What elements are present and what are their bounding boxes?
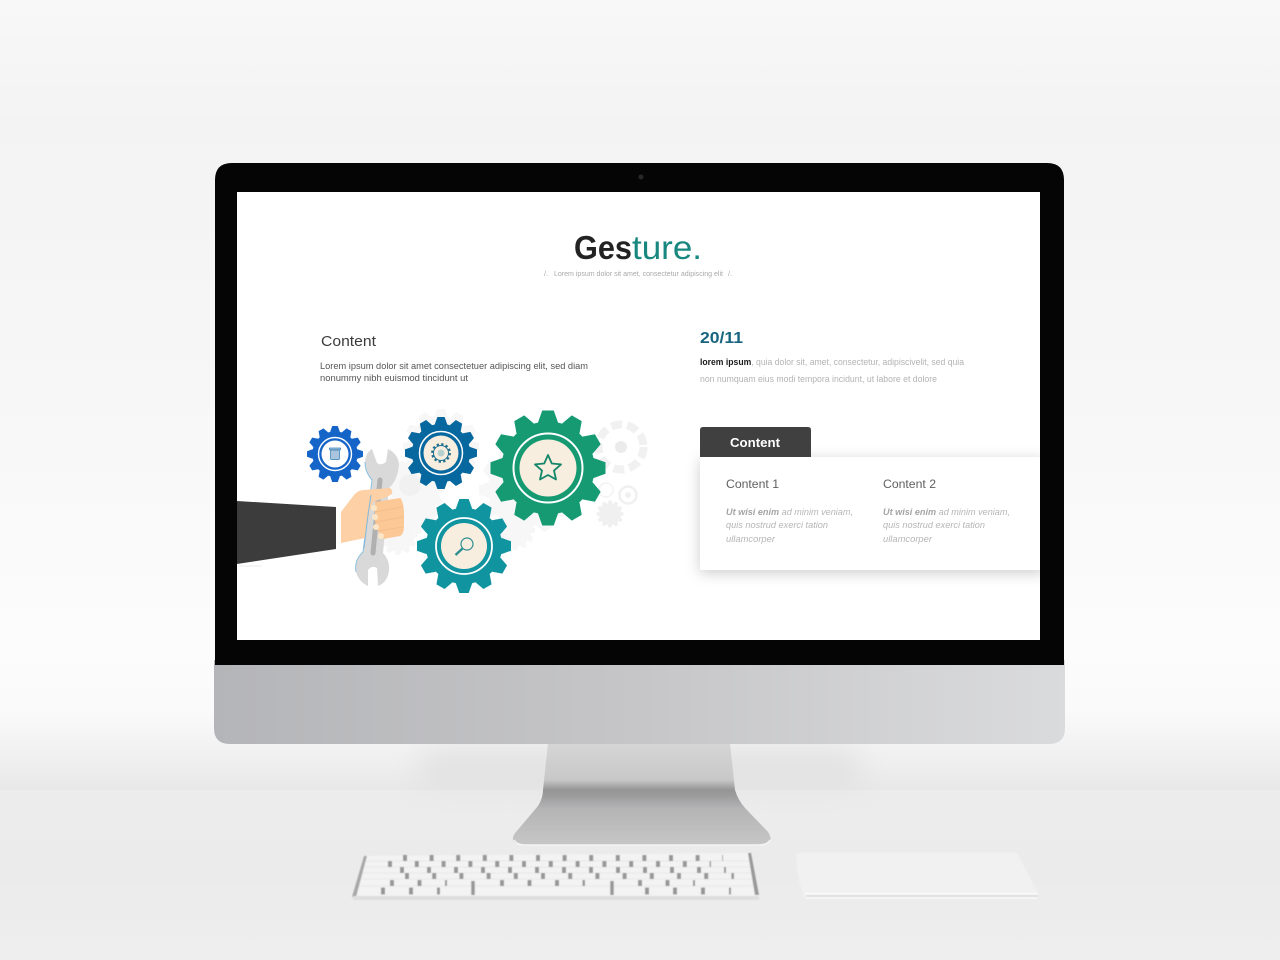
column: content 2: quis nostrud exerci tation xyxy=(883,520,985,531)
column: content 1: quis nostrud exerci tation xyxy=(726,520,828,531)
card tab xyxy=(700,427,811,457)
shadow under monitor xyxy=(420,745,860,785)
column: content 1: Content 1 xyxy=(726,477,779,491)
subtitle: /. xyxy=(728,269,732,278)
left paragraph: nonummy nibh euismod tincidunt ut xyxy=(320,373,468,384)
webcam xyxy=(638,174,644,180)
icon: trash can xyxy=(330,448,340,460)
subtitle: /. xyxy=(544,269,548,278)
column: content 1: Ut wisi enim ad minim veniam, xyxy=(726,507,853,518)
right paragraph: non numquam eius modi tempora incidunt, ut labore et dolore xyxy=(700,374,937,384)
right paragraph: lorem ipsum, quia dolor sit, amet, consectetur, adipiscivelit, sed quia xyxy=(700,357,964,367)
gear: magnifier icon, teal xyxy=(417,499,511,593)
icon: star xyxy=(535,455,561,480)
date heading: 20/11 xyxy=(700,330,743,347)
illustration: hand xyxy=(341,488,404,548)
column: content 1: ullamcorper xyxy=(726,534,776,545)
card tab: Content xyxy=(730,435,781,450)
title: Ges xyxy=(574,229,632,266)
keyboard xyxy=(352,853,759,900)
monitor body xyxy=(214,163,1065,744)
illustration: wrench xyxy=(356,449,399,586)
title: ture. xyxy=(632,229,702,266)
slide screen xyxy=(237,192,1045,640)
gear: star icon, green xyxy=(490,410,606,526)
icon: magnifier xyxy=(456,538,473,555)
left paragraph xyxy=(320,362,588,383)
gear: trash icon, blue xyxy=(307,426,363,482)
background ghost gears xyxy=(240,409,644,567)
title xyxy=(575,236,699,260)
gear: settings icon, dark blue xyxy=(405,417,477,489)
illustration: sleeve xyxy=(237,501,336,564)
icon: small gear xyxy=(432,444,450,462)
column: content 2 xyxy=(883,477,1010,545)
left paragraph: Lorem ipsum dolor sit amet consectetuer adipiscing elit, sed diam xyxy=(320,361,588,372)
monitor chin xyxy=(214,660,1065,744)
column: content 2: Content 2 xyxy=(883,477,936,491)
column: content 1 xyxy=(726,477,853,545)
column: content 2: ullamcorper xyxy=(883,534,933,545)
right paragraph xyxy=(700,357,964,384)
monitor stand xyxy=(513,743,770,845)
background: desk xyxy=(0,790,1280,960)
left heading: Content xyxy=(321,333,377,350)
trackpad xyxy=(796,853,1038,899)
column: content 2: Ut wisi enim ad minim veniam, xyxy=(883,507,1010,518)
monitor bezel xyxy=(215,163,1064,665)
card panel xyxy=(700,457,1045,570)
subtitle: Lorem ipsum dolor sit amet, consectetur adipiscing elit xyxy=(554,269,724,278)
key gaps xyxy=(381,858,734,895)
